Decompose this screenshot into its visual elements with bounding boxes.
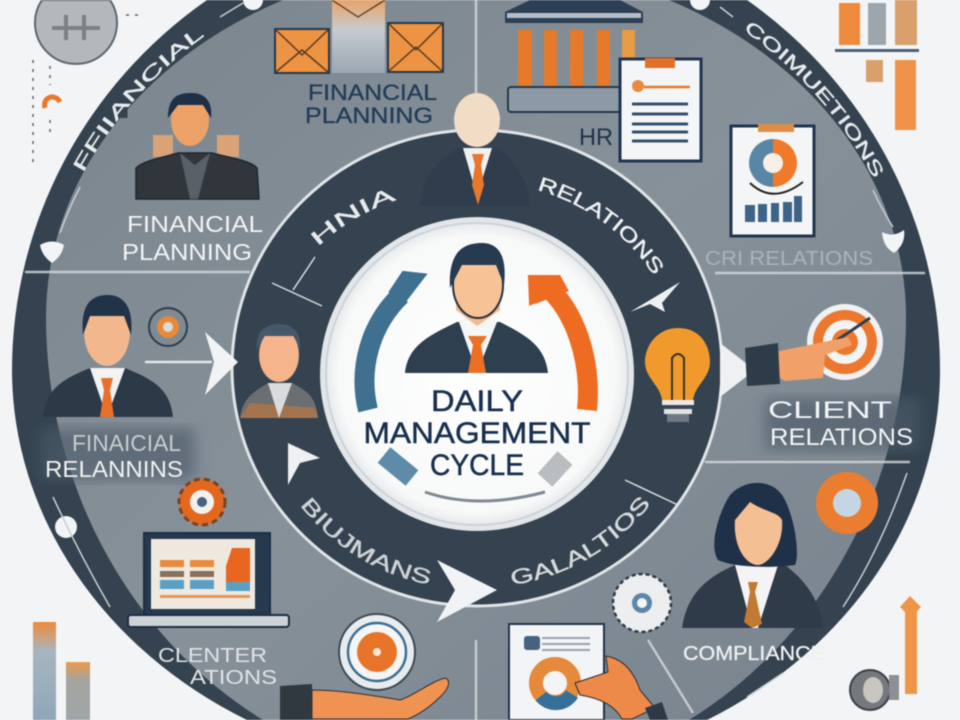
inner ring text: lower right: GALALTIOS — [510, 496, 650, 584]
icon: machine part — [850, 670, 899, 710]
arrow: right — [720, 343, 755, 397]
icon: envelopes — [275, 0, 443, 73]
center hub — [320, 217, 634, 531]
label: financial planning top: FINANCIAL — [308, 80, 437, 105]
label: client relations: CLIENT — [768, 397, 892, 424]
person: small inner — [240, 324, 318, 418]
inner dark ring — [232, 130, 722, 606]
center cycle arrows — [364, 274, 588, 501]
icon: hand holding document — [575, 656, 668, 720]
icon: open hand — [280, 678, 449, 720]
icon: clipboard list — [620, 58, 701, 161]
bar chart: top right — [835, 0, 919, 130]
label: HR: HR — [579, 124, 613, 151]
title: CYCLE — [430, 449, 524, 482]
icon: coin — [149, 308, 187, 346]
outer ring text: right: COIMUETIONS — [746, 22, 884, 178]
label: compliance: COMPLIANCE — [683, 643, 825, 665]
bar chart: bottom left — [33, 622, 90, 720]
label: client relations: RELATIONS — [770, 424, 913, 451]
dark label band: right — [765, 398, 920, 450]
icon: clipboard chart — [731, 124, 814, 236]
icon: light bulb — [645, 328, 710, 422]
arrow: large lower — [437, 560, 497, 622]
inner ring text: lower left: BIUJMANS — [300, 496, 431, 584]
icon: white gear — [613, 574, 671, 632]
inner ring text: upper right: RELATIONS — [538, 176, 664, 274]
outer ring text: left: FFIIANCIAL — [72, 32, 205, 172]
title: MANAGEMENT — [364, 417, 590, 450]
label: financial planning top — [305, 80, 437, 128]
label: financial planning white — [122, 211, 263, 265]
icon: target with pointing hand — [745, 304, 883, 386]
icon: laptop — [128, 533, 289, 627]
decoration icon: coin top left — [35, 0, 117, 64]
label: clenter ations: CLENTER — [158, 645, 267, 667]
label: financial planning top: PLANNING — [305, 103, 433, 128]
label: financial planning white: FINANCIAL — [127, 211, 263, 237]
arrow: left — [145, 332, 238, 395]
label: clenter ations: ATIONS — [190, 667, 277, 689]
decoration: orange accent — [33, 15, 144, 165]
title — [364, 385, 590, 482]
person: left — [43, 295, 173, 417]
icon: target lower — [339, 614, 415, 690]
icon: orange ring — [816, 472, 878, 534]
inner ring ticks and arrows — [272, 257, 680, 505]
label: client relations — [768, 397, 913, 451]
label: financial relannins — [45, 430, 183, 482]
center person — [405, 243, 548, 373]
label: financial relannins: RELANNINS — [45, 456, 183, 482]
person: top center — [420, 93, 530, 206]
dark label band: left — [40, 428, 195, 480]
person: upper left group — [136, 93, 259, 199]
inner ring text: upper left: HNIA — [310, 190, 397, 246]
icon: document with donut — [509, 624, 604, 720]
icon: orange up arrow — [900, 596, 921, 694]
icon: orange gear — [179, 479, 225, 525]
person: woman — [682, 483, 823, 628]
icon: building — [505, 0, 643, 112]
label: clenter ations — [158, 645, 277, 689]
label: CR relations: CRI RELATIONS — [705, 248, 873, 270]
label: financial relannins: FINAICIAL — [72, 430, 181, 456]
title: DAILY — [431, 385, 523, 418]
label: financial planning white: PLANNING — [122, 239, 252, 265]
